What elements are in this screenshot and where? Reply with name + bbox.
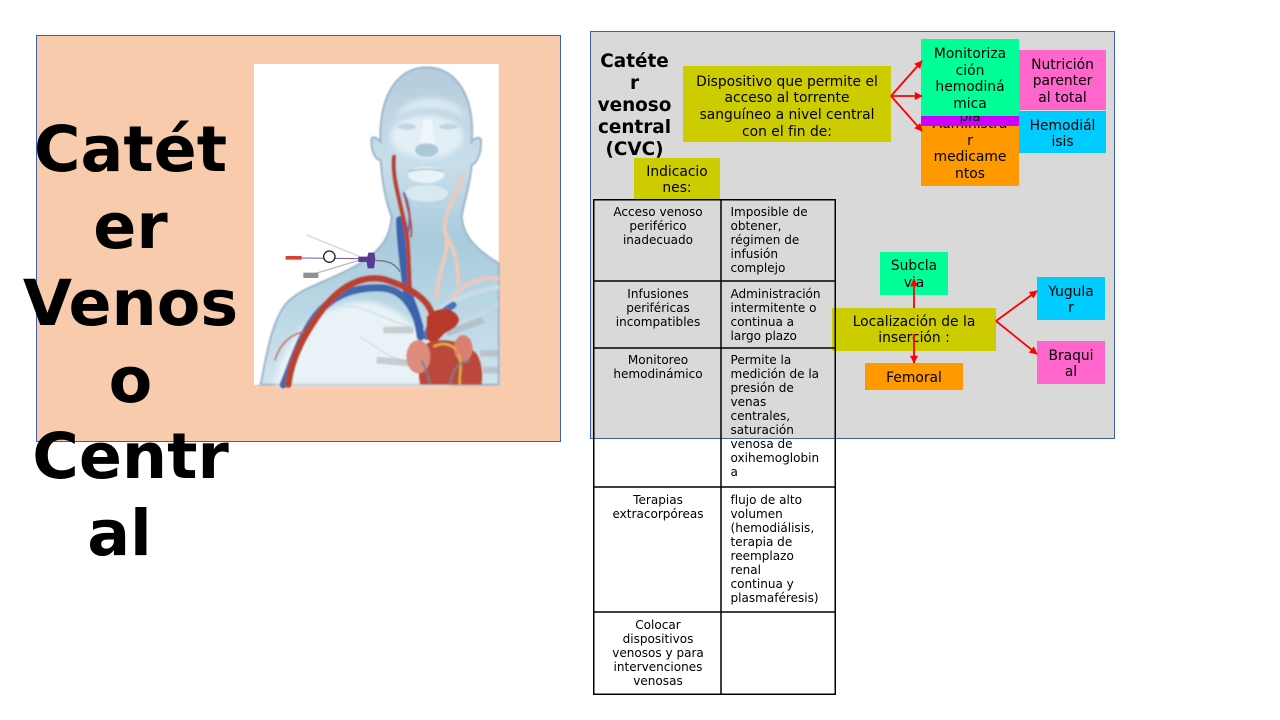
box: nutrición parenteral total: al total — [1038, 90, 1087, 106]
box: definition: sanguíneo a nivel central — [700, 107, 874, 123]
box: definition: Dispositivo que permite el — [696, 74, 878, 90]
row 4 detail: terapia de — [730, 535, 792, 549]
row 2 detail: largo plazo — [730, 329, 797, 343]
box: terapia — [921, 102, 1019, 126]
heading: Catéter venoso central — [598, 50, 671, 160]
row 4 detail: flujo de alto — [730, 493, 802, 507]
box: yugular: Yugula — [1048, 284, 1094, 300]
box: monitorización hemodinámica: ción — [956, 63, 984, 79]
heading: Catéter venoso central: r — [630, 73, 639, 94]
title: er — [93, 189, 168, 263]
box: indicaciones: Indicacio — [646, 164, 708, 180]
box: monitorización hemodinámica: Monitoriza — [934, 46, 1006, 62]
title: al — [87, 496, 152, 570]
row 2 — [616, 287, 700, 329]
heading: Catéter venoso central: (CVC) — [605, 139, 664, 160]
row 2 detail — [730, 287, 821, 343]
row 3: Monitoreo — [628, 353, 688, 367]
row 3: hemodinámico — [613, 367, 703, 381]
row 4 detail: renal — [730, 563, 761, 577]
box: nutrición parenteral total — [1019, 50, 1106, 110]
row 2 detail: intermitente o — [730, 301, 817, 315]
box: administrar medicamentos: medicame — [934, 149, 1006, 165]
box: braquial: Braqui — [1048, 348, 1094, 364]
box: subclavia: via — [904, 275, 924, 291]
table: indicaciones — [593, 199, 836, 695]
heading: Catéter venoso central: Catéte — [600, 50, 669, 72]
row 1 detail: complejo — [730, 261, 785, 275]
title: Centr — [32, 419, 229, 493]
row 4 detail: volumen — [730, 507, 783, 521]
row 2 detail: Administración — [730, 287, 821, 301]
box: indicaciones: nes: — [662, 180, 692, 196]
box: nutrición parenteral total: Nutrición — [1031, 56, 1094, 72]
box: administrar medicamentos: r — [967, 133, 973, 149]
heading: Catéter venoso central: central — [598, 117, 671, 138]
row 1 detail: obtener, — [730, 219, 781, 233]
row 1 — [613, 205, 703, 247]
panel: right information panel — [590, 31, 1115, 439]
row 1 detail: infusión — [730, 247, 778, 261]
row 4 detail — [730, 493, 819, 605]
row 3 detail: saturación — [730, 423, 794, 437]
row 4 — [612, 493, 704, 521]
row 3 detail: a — [730, 465, 738, 479]
box: monitorización hemodinámica — [921, 39, 1019, 116]
row 4 detail: (hemodiálisis, — [730, 521, 814, 535]
title — [23, 112, 238, 570]
box: hemodiálisis: Hemodiál — [1030, 118, 1095, 134]
row 1: inadecuado — [623, 233, 693, 247]
row 3 detail: oxihemoglobin — [730, 451, 819, 465]
row 4 detail: plasmaféresis) — [730, 591, 819, 605]
box: femoral — [865, 363, 963, 390]
illustration: catheter in central vein, torso and heart — [254, 64, 500, 390]
row 3 — [613, 353, 703, 381]
row 3 detail: Permite la — [730, 353, 791, 367]
box: terapia: pia — [959, 109, 981, 125]
box: nutrición parenteral total: parenter — [1033, 73, 1092, 89]
row 3 detail — [730, 353, 819, 479]
box: localización de la inserción: Localización de la — [853, 314, 975, 330]
box: definition: con el fin de: — [742, 124, 832, 140]
row 3 detail: centrales, — [730, 409, 790, 423]
row 5: Colocar — [635, 618, 681, 632]
box: monitorización hemodinámica: mica — [953, 96, 987, 112]
box: localización de la inserción — [832, 308, 996, 351]
box: braquial: al — [1065, 364, 1077, 380]
box: definition — [683, 66, 891, 142]
row 4: extracorpóreas — [612, 507, 704, 521]
row 1: Acceso venoso — [613, 205, 703, 219]
box: indicaciones — [634, 158, 720, 200]
row 3 detail: venosa de — [730, 437, 793, 451]
row 5: venosas — [633, 674, 683, 688]
row 4: Terapias — [633, 493, 683, 507]
row 2: periféricas — [626, 301, 690, 315]
title: o — [109, 342, 152, 416]
box: hemodiálisis — [1019, 111, 1106, 153]
box: braquial — [1037, 341, 1105, 384]
title: Catét — [34, 112, 227, 186]
row 4 detail: reemplazo — [730, 549, 794, 563]
row 1 detail — [730, 205, 808, 275]
row 5: dispositivos — [623, 632, 693, 646]
row 5: venosos y para — [612, 646, 704, 660]
box: hemodiálisis: isis — [1051, 134, 1074, 150]
box: femoral: Femoral — [886, 370, 942, 386]
box: administrar medicamentos: Administra — [933, 116, 1007, 132]
row 3 detail: presión de — [730, 381, 794, 395]
title: Venos — [23, 266, 238, 340]
box: yugular: r — [1068, 300, 1074, 316]
box: administrar medicamentos — [921, 115, 1019, 186]
row 3 detail: medición de la — [730, 367, 819, 381]
row 2: incompatibles — [616, 315, 700, 329]
row 5: intervenciones — [614, 660, 702, 674]
icon: catheter device — [286, 235, 400, 278]
box: subclavia: Subcla — [891, 258, 937, 274]
box: subclavia — [880, 252, 948, 295]
row 4 detail: continua y — [730, 577, 794, 591]
row 2: Infusiones — [627, 287, 689, 301]
row 5 — [612, 618, 704, 688]
row 1: periférico — [629, 219, 687, 233]
heading: Catéter venoso central: venoso — [598, 95, 671, 116]
row 1 detail: Imposible de — [730, 205, 808, 219]
box: definition: acceso al torrente — [724, 90, 850, 106]
box: monitorización hemodinámica: hemodiná — [935, 79, 1005, 95]
box: yugular — [1037, 277, 1105, 320]
box: localización de la inserción: inserción : — [878, 330, 950, 346]
row 2 detail: continua a — [730, 315, 794, 329]
row 3 detail: venas — [730, 395, 766, 409]
row 1 detail: régimen de — [730, 233, 799, 247]
box: administrar medicamentos: ntos — [955, 166, 985, 182]
panel: left title panel — [36, 35, 561, 442]
